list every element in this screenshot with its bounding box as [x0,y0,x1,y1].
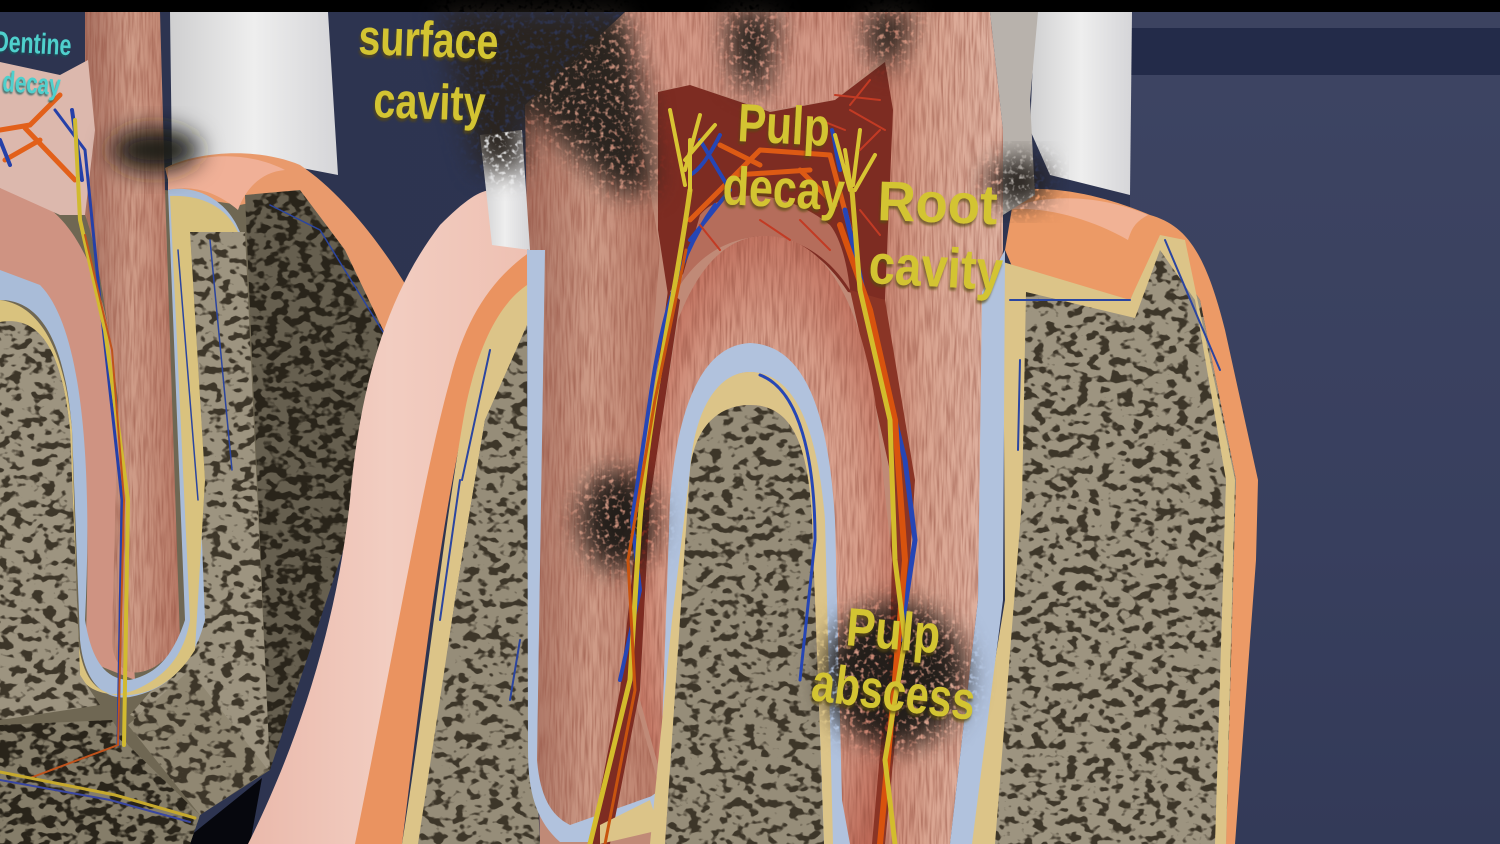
main tooth right canal [850,290,915,844]
left tooth inner arch [0,188,135,680]
left tooth decay [110,128,200,172]
label: Dentine decay [0,26,72,102]
left tooth enamel [170,12,338,175]
label: surface cavity: cavity [373,72,487,132]
main tooth left canal [590,290,680,844]
label: Pulp decay: Pulp [736,93,831,158]
main tooth enamel edge [990,12,1038,215]
main tooth gum left [248,190,530,844]
label: Pulp abscess [809,597,979,732]
label: Pulp abscess: Pulp [844,597,943,665]
main tooth left dentine [525,105,660,832]
left tooth arch bone [0,315,105,725]
label: surface cavity [358,9,499,132]
main tooth right dentine [850,12,1003,844]
left tooth nerves and vessels [0,95,385,822]
main tooth bone left [415,322,543,844]
left tooth floor bone [0,718,205,844]
main tooth enamel left [480,130,530,250]
main tooth blue band left [527,250,660,842]
left tooth yellow band [0,196,238,695]
left tooth dark bone [245,190,384,770]
main tooth [248,12,1258,844]
pulp vessels and nerves [440,80,1220,844]
label: Pulp abscess: abscess [809,652,979,732]
left tooth underlay [0,190,388,844]
decay: root left [580,470,656,570]
main tooth inner bone [660,402,830,844]
main tooth pulp floor [680,196,850,290]
label: Dentine decay: decay [2,66,62,102]
left tooth [0,12,410,844]
main tooth bone right [985,235,1240,844]
decay: crown top [725,12,915,95]
left tooth gum [165,153,410,345]
decay: abscess [823,603,967,747]
main tooth underlay [525,12,1003,844]
left tooth floor bone right [125,668,271,818]
label: Pulp decay: decay [721,156,846,222]
main tooth enamel right [1030,12,1132,195]
main tooth blue band right [950,250,1005,844]
main tooth orange strip left [355,252,532,844]
label: Root cavity: cavity [867,232,1004,302]
left tooth blue band [0,189,240,697]
main tooth yellow band right [965,235,1235,844]
main tooth inner blue band [625,343,850,844]
main tooth inner yellow band [650,372,833,844]
label: Root cavity: Root [877,169,999,236]
decay: gum line [988,158,1048,206]
decay: top left [440,12,655,195]
main tooth root tip [600,800,660,844]
main tooth inner arch dentine [640,236,892,844]
main tooth yellow band left [402,282,532,844]
main tooth gum top surface [1005,198,1148,240]
label: surface cavity: surface [358,9,499,70]
main tooth pulp chamber [658,62,893,300]
label: Root cavity [867,169,1004,302]
left tooth pulp [0,60,95,215]
left tooth dentine root [85,12,180,673]
left tooth gum top surface [168,156,285,210]
main tooth gum right [1005,189,1258,844]
main tooth crown dentine [625,12,880,125]
decay spots [440,12,1048,747]
label: Pulp decay [721,93,846,222]
left tooth front bone [125,228,275,773]
